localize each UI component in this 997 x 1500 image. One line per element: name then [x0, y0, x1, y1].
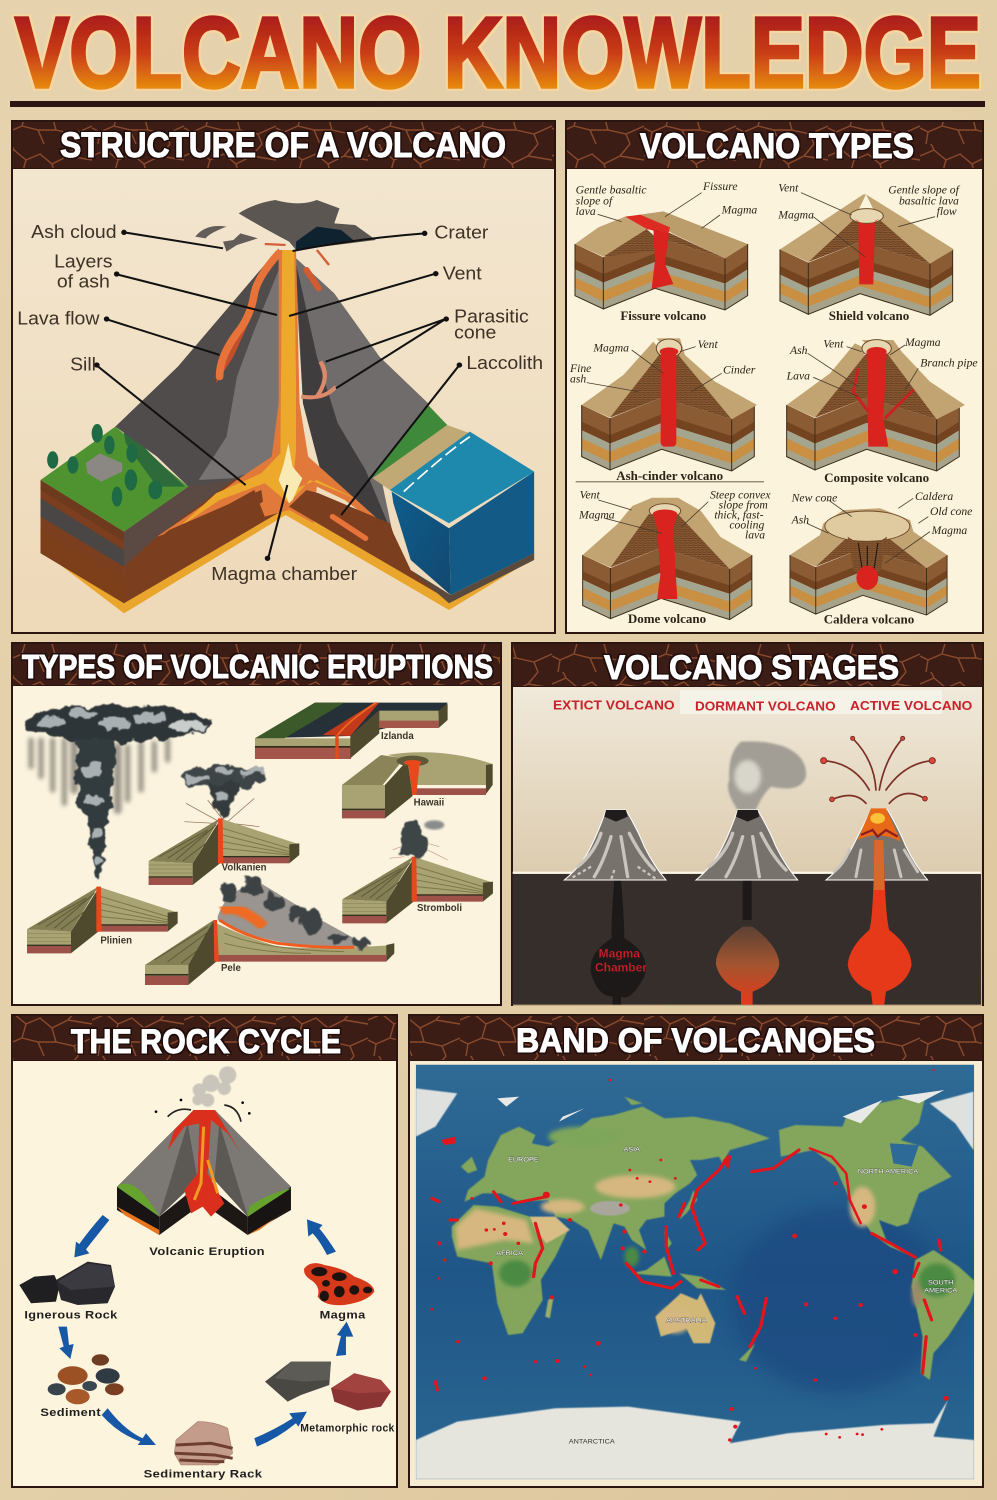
continent labels: SOUTH — [928, 1280, 953, 1287]
continent labels — [496, 1147, 958, 1445]
metamorphic rock — [265, 1362, 391, 1411]
rock cycle diagram: Sediment — [40, 1407, 101, 1419]
plinian ash column — [23, 705, 213, 953]
volcano cutaway diagram: Crater — [434, 223, 489, 243]
six volcano type diagrams: Magma — [592, 342, 629, 355]
extinct volcano: Chamber — [595, 961, 647, 975]
six volcano type diagrams: cooling — [729, 518, 764, 531]
heading: volcano stages: VOLCANO STAGES — [604, 649, 899, 687]
six volcano type diagrams: Magma — [777, 208, 814, 221]
extinct volcano — [564, 810, 666, 1005]
ash-cinder volcano — [582, 338, 757, 471]
continent labels: AUSTRALIA — [666, 1318, 707, 1324]
igneous rock — [19, 1262, 115, 1305]
panel: volcano stages — [511, 642, 984, 1006]
panel: types of volcanic eruptions — [11, 642, 502, 1006]
six volcano type diagrams: Steep convex — [710, 488, 771, 501]
eruption diagrams: Hawaii — [414, 798, 444, 809]
volcano cutaway diagram — [17, 200, 543, 613]
composite volcano — [787, 340, 965, 471]
continent labels: AMERICA — [924, 1288, 958, 1295]
six volcano type diagrams: basaltic lava — [899, 194, 959, 207]
continent labels: EUROPE — [508, 1157, 539, 1163]
extinct volcano: Magma — [599, 946, 640, 960]
six volcano type diagrams: Fissure volcano — [620, 308, 706, 323]
magma — [304, 1263, 374, 1305]
six volcano type diagrams: ash — [570, 373, 586, 386]
dormant volcano — [696, 741, 806, 1005]
volcano cutaway diagram: Laccolith — [466, 353, 543, 374]
rock cycle diagram: Volcanic Eruption — [149, 1246, 265, 1258]
shield volcano — [780, 194, 954, 315]
six volcano type diagrams: Cinder — [723, 363, 756, 376]
six volcano type diagrams: Caldera — [915, 490, 953, 503]
eruption diagrams — [23, 703, 493, 985]
active volcano — [821, 736, 935, 1005]
stages diagram: EXTICT VOLCANO — [553, 697, 675, 712]
heading: band of volcanoes: BAND OF VOLCANOES — [516, 1022, 875, 1060]
eruption diagrams: Pele — [221, 963, 241, 974]
panel: band of volcanoes — [408, 1014, 984, 1488]
six volcano type diagrams: slope from — [719, 498, 768, 511]
six volcano type diagrams: Ash-cinder volcano — [616, 468, 723, 483]
eruption diagrams: Izlanda — [381, 731, 414, 742]
six volcano type diagrams: Dome volcano — [628, 611, 706, 626]
rock cycle diagram — [19, 1066, 395, 1481]
pelean eruption — [145, 877, 394, 985]
panel: structure of a volcano — [11, 120, 556, 634]
stages diagram: DORMANT VOLCANO — [695, 699, 836, 714]
six volcano type diagrams: Shield volcano — [829, 308, 909, 323]
eruption diagrams: Plinien — [100, 935, 132, 946]
strombolian eruption — [342, 820, 493, 923]
rock cycle diagram: Ignerous Rock — [24, 1310, 118, 1322]
stages diagram — [513, 697, 981, 1005]
eruption diagrams: Volkanien — [222, 863, 267, 874]
continent labels: ANTARCTICA — [569, 1439, 615, 1445]
six volcano type diagrams: Gentle slope of — [888, 183, 961, 196]
six volcano type diagrams: lava — [745, 528, 765, 541]
cycle arrows — [58, 1215, 353, 1447]
scattered volcano markers — [430, 1069, 949, 1442]
heading: types of volcanic eruptions: TYPES OF VOLCANIC ERUPTIONS — [22, 648, 493, 685]
six volcano type diagrams: Vent — [778, 182, 799, 195]
six volcano type diagrams: slope of — [576, 194, 614, 207]
volcano eruption illustration — [117, 1066, 291, 1235]
six volcano type diagrams: Caldera volcano — [824, 611, 914, 626]
six volcano type diagrams: Ash — [789, 344, 808, 357]
stages diagram: ACTIVE VOLCANO — [850, 698, 972, 713]
sediment — [48, 1354, 124, 1404]
volcano cutaway diagram: Vent — [443, 264, 482, 284]
six volcano type diagrams: lava — [576, 205, 596, 218]
continent labels: ASIA — [623, 1147, 640, 1153]
heading: the rock cycle: THE ROCK CYCLE — [71, 1023, 341, 1061]
six volcano type diagrams — [569, 180, 978, 626]
caldera volcano — [790, 508, 947, 615]
six volcano type diagrams: Magma — [578, 508, 615, 521]
six volcano type diagrams: Magma — [931, 524, 967, 537]
world map — [416, 1065, 977, 1479]
volcano cutaway diagram: Lava flow — [17, 309, 100, 330]
panel: the rock cycle — [11, 1014, 398, 1488]
rock cycle diagram: Magma — [320, 1309, 366, 1321]
six volcano type diagrams: Vent — [580, 488, 600, 501]
hawaiian shield — [342, 752, 493, 818]
six volcano type diagrams: Vent — [698, 338, 718, 351]
vulcanian eruption — [149, 765, 299, 885]
heading: structure of a volcano: STRUCTURE OF A VOLCANO — [60, 126, 506, 165]
six volcano type diagrams: Branch pipe — [920, 357, 978, 370]
continents — [416, 1088, 977, 1479]
volcano belts — [432, 1148, 941, 1390]
panel: volcano types — [565, 120, 984, 634]
six volcano type diagrams: Fine — [569, 362, 591, 375]
fissure volcano — [575, 211, 748, 310]
six volcano type diagrams: Lava — [786, 369, 810, 382]
rock cycle diagram: Metamorphic rock — [300, 1423, 395, 1435]
six volcano type diagrams: Gentle basaltic — [576, 183, 647, 196]
six volcano type diagrams: Magma — [721, 203, 757, 216]
six volcano type diagrams: thick, fast- — [714, 508, 764, 521]
rock cycle diagram: Sedimentary Rack — [144, 1469, 263, 1481]
eruption diagrams: Stromboli — [417, 903, 462, 914]
sedimentary rock — [174, 1422, 233, 1465]
six volcano type diagrams: New cone — [791, 492, 837, 505]
six volcano type diagrams: flow — [937, 205, 957, 218]
volcano cutaway diagram: Ash cloud — [31, 222, 117, 243]
six volcano type diagrams: Old cone — [930, 505, 972, 518]
six volcano type diagrams: Composite volcano — [824, 470, 929, 485]
continent labels: NORTH AMERICA — [858, 1169, 919, 1175]
volcano cutaway diagram: Parasitic — [454, 307, 529, 328]
continent labels: AFRICA — [496, 1250, 523, 1257]
dome volcano — [583, 498, 752, 620]
volcano cutaway diagram: Magma chamber — [211, 564, 358, 585]
six volcano type diagrams: Magma — [904, 336, 941, 349]
volcano cutaway diagram: cone — [454, 323, 496, 344]
volcano cutaway diagram: Layers — [54, 252, 112, 272]
volcano cutaway diagram: Sill — [70, 355, 96, 376]
six volcano type diagrams: Vent — [823, 337, 844, 350]
volcano cutaway diagram: of ash — [57, 272, 110, 292]
six volcano type diagrams: Fissure — [702, 180, 738, 193]
heading: volcano types: VOLCANO TYPES — [640, 127, 914, 166]
iceland fissure — [255, 703, 448, 759]
six volcano type diagrams: Ash — [791, 513, 809, 526]
